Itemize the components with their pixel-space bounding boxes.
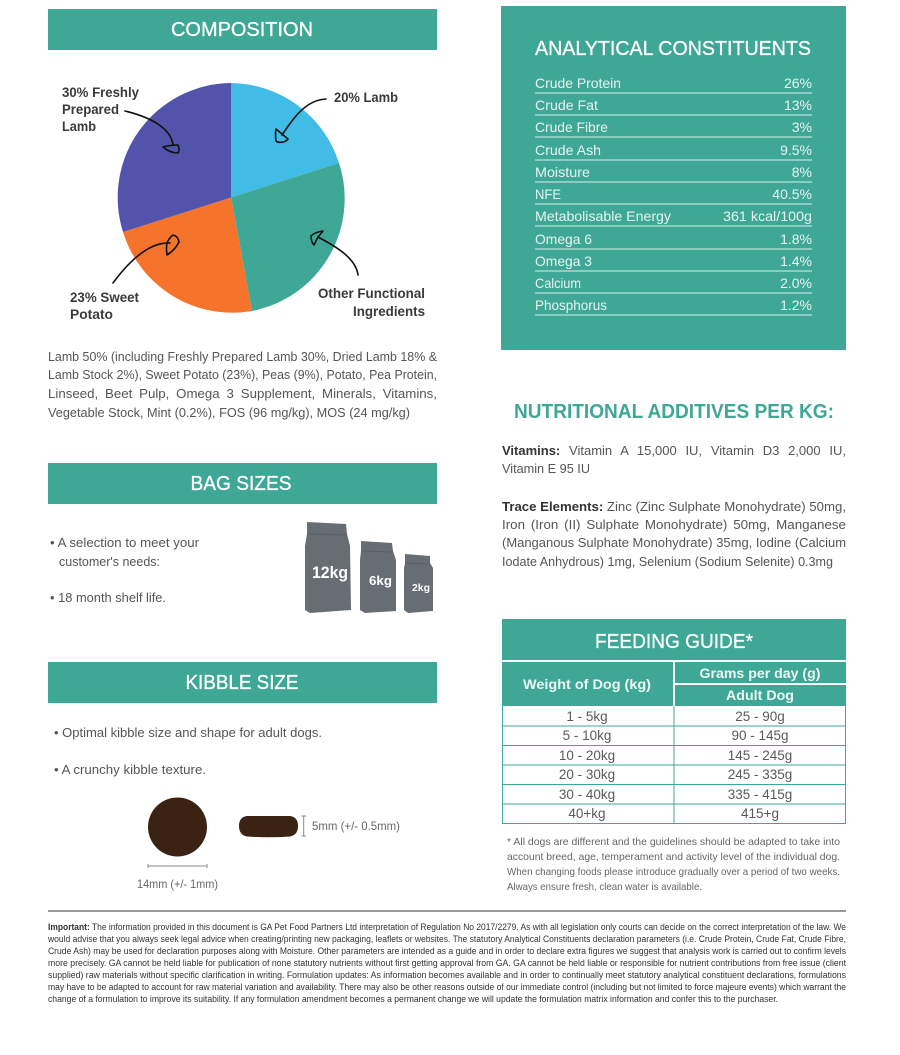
table: feeding guide: 10 - 20kg: [559, 748, 615, 763]
table: constituents: Calcium: [535, 275, 581, 291]
heading: bag sizes: BAG SIZES: [190, 473, 292, 495]
heading: kibble size: KIBBLE SIZE: [186, 672, 298, 694]
table: constituents: Crude Fat: [535, 97, 598, 113]
table: constituents: Phosphorus: [535, 297, 607, 313]
table: feeding guide: [502, 662, 846, 824]
text: composition list: Lamb 50% (including Freshly Prepared Lamb 30%, Dried Lamb 18% &: [48, 350, 438, 364]
table: constituents: Crude Fibre: [535, 119, 608, 135]
text: composition list: Lamb Stock 2%), Sweet Potato (23%), Peas (9%), Potato, Pea Protein,: [48, 368, 437, 382]
text: bag size bullets: • A selection to meet your: [50, 536, 199, 550]
text: feeding footnote: When changing foods please introduce gradually over a period of two weeks.: [507, 867, 840, 878]
pie chart: composition: [118, 83, 345, 313]
arrow: sweet potato: [113, 235, 179, 283]
label: sweet potato: Potato: [70, 307, 113, 322]
table: feeding guide: 1 - 5kg: [566, 709, 608, 724]
table: feeding guide: 245 - 335g: [728, 767, 792, 782]
label: freshly prepared lamb: Lamb: [62, 119, 96, 134]
text: legal disclaimer: more precisely. GA cannot be held liable for publication of none statutory nutrients without first getting approval from GA. GA cannot be held liable or responsible for nutrient contributions from free issue (client: [48, 958, 847, 968]
table: constituents: 3%: [792, 119, 812, 135]
text: feeding footnote: Always ensure fresh, clean water is available.: [507, 882, 702, 893]
table: constituents: 40.5%: [772, 186, 812, 202]
panel: composition: [48, 9, 438, 420]
arrow: freshly prepared lamb: [125, 111, 179, 153]
dimension: kibble width: [137, 864, 218, 891]
text: legal disclaimer: [47, 922, 847, 1004]
dimension: kibble width: 14mm (+/- 1mm): [137, 877, 218, 891]
table: feeding guide: 25 - 90g: [735, 709, 785, 724]
text: trace elements: Iodate Anhydrous) 1mg, Selenium (Sodium Selenite) 0.3mg: [502, 555, 833, 569]
text: composition list: Vegetable Stock, Mint (0.2%), FOS (96 mg/kg), MOS (24 mg/kg): [48, 406, 410, 420]
table: constituents: 26%: [784, 75, 812, 91]
icon: kibble side view: [239, 816, 298, 837]
text: bag size bullets: customer's needs:: [59, 555, 160, 569]
table: constituents: Moisture: [535, 164, 590, 180]
table: constituents: NFE: [535, 186, 561, 202]
table: constituents: 1.4%: [780, 253, 812, 269]
table: feeding guide: 30 - 40kg: [559, 787, 615, 802]
icon: 2kg bag: 2kg: [412, 582, 430, 594]
label: freshly prepared lamb: 30% Freshly: [62, 85, 139, 100]
label: other functional ingredients: [318, 286, 425, 319]
text: feeding footnote: [507, 837, 840, 893]
text: vitamins: Vitamin E 95 IU: [502, 462, 590, 476]
table: constituents: 1.2%: [780, 297, 812, 313]
label: lamb: 20% Lamb: [334, 90, 398, 105]
divider rule: [48, 910, 846, 912]
panel: nutritional additives: [502, 401, 846, 569]
text: trace elements: (Manganous Sulphate Monohydrate) 35mg, Iodine (Calcium: [502, 536, 846, 550]
table: constituents: Crude Protein: [535, 75, 621, 91]
panel: kibble size: [48, 662, 437, 891]
heading: analytical constituents: ANALYTICAL CONSTITUENTS: [535, 38, 811, 60]
icon: 2kg bag: [404, 554, 433, 613]
table: constituents: Omega 3: [535, 253, 592, 269]
text: trace elements: [502, 500, 846, 569]
table: constituents: 1.8%: [780, 231, 812, 247]
text: vitamins: [502, 444, 846, 476]
text: legal disclaimer: may have to be adapted to account for raw material variation and availability. There may also be other reasons outside of our immediate control (including but not limited to force majeure events) which warrant the: [48, 982, 846, 992]
table: feeding guide: Grams per day (g): [700, 665, 820, 681]
text: legal disclaimer: Important: The information provided in this document is GA Pet Food Partners Ltd interpretation of Regulation No 2017/2279. As with all legislation only courts can decide on the correct interpretation of the law. We: [48, 922, 846, 932]
table: feeding guide: Adult Dog: [726, 687, 794, 703]
label: other functional ingredients: Ingredients: [353, 304, 425, 319]
table: feeding guide: 90 - 145g: [731, 728, 789, 743]
text: feeding footnote: account breed, age, temperament and activity level of the individual dog.: [507, 852, 840, 863]
table: feeding guide: 415+g: [741, 806, 779, 821]
label: freshly prepared lamb: Prepared: [62, 102, 119, 117]
heading: kibble size: [48, 662, 437, 703]
panel: bag sizes: [48, 463, 437, 613]
label: sweet potato: [70, 290, 139, 322]
text: composition list: Linseed, Beet Pulp, Omega 3 Supplement, Minerals, Vitamins,: [48, 387, 437, 401]
table: feeding guide: 335 - 415g: [728, 787, 792, 802]
heading: feeding guide: [502, 619, 846, 660]
table: feeding guide: Weight of Dog (kg): [523, 676, 651, 692]
table: constituents: 13%: [784, 97, 812, 113]
icon: 12kg bag: 12kg: [312, 563, 348, 582]
text: trace elements: Trace Elements: Zinc (Zinc Sulphate Monohydrate) 50mg,: [502, 500, 846, 514]
table: constituents: Crude Ash: [535, 142, 601, 158]
table: constituents: Metabolisable Energy: [535, 208, 671, 224]
text: bag size bullets: [50, 536, 199, 605]
text: bag size bullets: • 18 month shelf life.: [50, 591, 166, 605]
icon: kibble top view: [148, 798, 207, 856]
table: constituents: 9.5%: [780, 142, 812, 158]
table: feeding guide: 145 - 245g: [728, 748, 792, 763]
table: feeding guide: 20 - 30kg: [559, 767, 615, 782]
label: freshly prepared lamb: [62, 85, 139, 134]
text: legal disclaimer: supplied) raw materials without specific clarification in writing. Formulation updates: As information becomes available and in order to continually meet statutory analytical constituent declarations, formulations: [48, 970, 847, 980]
arrow: other functional ingredients: [311, 231, 358, 275]
text: legal disclaimer: would advise that you always seek legal advice when creating/printing new packaging, leaflets or websites. The statutory Analytical Constituents declaration parameters (i.e. Crude Protein, Crude Fat, Crude Fibre,: [47, 934, 846, 944]
table: constituents: 2.0%: [780, 275, 812, 291]
text: kibble bullets: • A crunchy kibble texture.: [54, 763, 206, 777]
arrow: lamb: [276, 99, 326, 142]
table: constituents: 361 kcal/100g: [723, 208, 812, 224]
heading: nutritional additives: NUTRITIONAL ADDITIVES PER KG:: [514, 401, 834, 423]
text: legal disclaimer: change of a formulation to improve its suitability. If any formulation amendment becomes a permanent change we will update the formulation matrix information and confer this to the purchaser.: [48, 994, 778, 1004]
text: vitamins: Vitamins: Vitamin A 15,000 IU, Vitamin D3 2,000 IU,: [502, 444, 846, 458]
icon: 6kg bag: 6kg: [369, 573, 392, 588]
icon: 6kg bag: [360, 541, 396, 613]
table: feeding guide: 40+kg: [568, 806, 606, 821]
table: feeding guide: 5 - 10kg: [563, 728, 611, 743]
text: feeding footnote: * All dogs are different and the guidelines should be adapted to take into: [507, 837, 840, 848]
icon: 12kg bag: [305, 522, 351, 613]
panel: feeding guide: [502, 619, 846, 893]
panel: analytical constituents: [501, 6, 846, 350]
text: legal disclaimer: Crude Ash) may be used for declaration purposes along with Moisture. Other parameters are intended as a guide and in order to declare extra figures we suggest that analysis work is carried out to confirm levels: [48, 946, 847, 956]
heading: feeding guide: FEEDING GUIDE*: [595, 631, 753, 653]
heading: composition: COMPOSITION: [171, 19, 313, 41]
heading: bag sizes: [48, 463, 437, 504]
label: other functional ingredients: Other Functional: [318, 286, 425, 301]
text: composition list: [48, 350, 438, 420]
text: kibble bullets: [54, 726, 322, 777]
heading: composition: [48, 9, 437, 50]
dimension: kibble height: 5mm (+/- 0.5mm): [312, 819, 400, 833]
label: sweet potato: 23% Sweet: [70, 290, 139, 305]
table: constituents: 8%: [792, 164, 812, 180]
text: kibble bullets: • Optimal kibble size and shape for adult dogs.: [54, 726, 322, 740]
table: constituents: Omega 6: [535, 231, 592, 247]
table: constituents: [535, 75, 812, 315]
dimension: kibble height: [302, 816, 400, 836]
text: trace elements: Iron (Iron (II) Sulphate Monohydrate) 50mg, Manganese: [502, 518, 846, 532]
